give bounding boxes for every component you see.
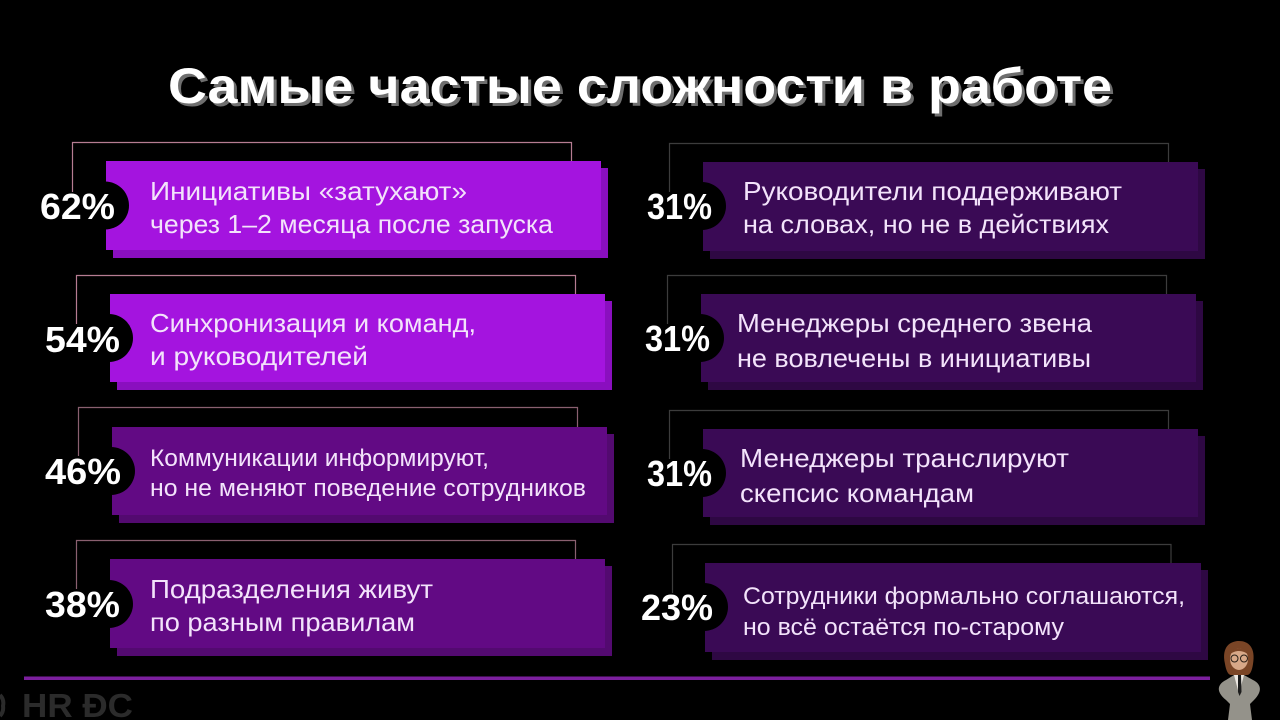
panel: 23% employees formally agree <box>641 544 1208 660</box>
panel: 46% communications <box>45 408 614 523</box>
title: Самые частые сложности в работе <box>168 58 1112 114</box>
text: synchronisation <box>150 308 476 371</box>
text: initiatives fade <box>150 176 554 239</box>
text: departments <box>150 574 433 637</box>
text: communications: Коммуникации информируют, <box>150 445 489 472</box>
text: synchronisation: и руководителей <box>150 341 368 371</box>
text: communications <box>150 445 586 502</box>
text: middle managers not involved: не вовлечены в инициативы <box>737 343 1091 373</box>
panel: 31% managers broadcast scepticism <box>647 410 1205 525</box>
panel: 38% departments <box>45 540 612 656</box>
text: leaders support in words: на словах, но не в действиях <box>743 209 1109 239</box>
text: initiatives fade: через 1–2 месяца после запуска <box>150 209 554 239</box>
text: departments: Подразделения живут <box>150 574 433 604</box>
panel: 62% initiatives fade <box>40 142 608 258</box>
label: 23%: 23% <box>641 587 713 628</box>
text: synchronisation: Синхронизация и команд, <box>150 308 476 338</box>
label: 31%: 31% <box>647 186 712 227</box>
label: 62%: 62% <box>40 186 115 227</box>
text: managers broadcast scepticism: Менеджеры транслируют <box>740 443 1069 473</box>
panel: 31% leaders support in words <box>647 144 1205 259</box>
label: 31%: 31% <box>647 453 712 494</box>
label: 38%: 38% <box>45 584 120 625</box>
text: middle managers not involved <box>737 308 1093 373</box>
label: 46%: 46% <box>45 451 121 492</box>
text: middle managers not involved: Менеджеры среднего звена <box>737 308 1093 338</box>
text: employees formally agree <box>743 583 1185 641</box>
icon: woman in grey suit <box>1219 641 1260 720</box>
footer line <box>24 676 1210 680</box>
text: managers broadcast scepticism <box>740 443 1069 508</box>
panel: 31% middle managers not involved <box>645 276 1203 390</box>
text: initiatives fade: Инициативы «затухают» <box>150 176 467 206</box>
panel: 54% synchronisation <box>45 276 612 390</box>
text: leaders support in words: Руководители поддерживают <box>743 176 1122 206</box>
text: managers broadcast scepticism: скепсис командам <box>740 478 974 508</box>
text: communications: но не меняют поведение сотрудников <box>150 475 586 502</box>
label: 54%: 54% <box>45 319 120 360</box>
text: departments: по разным правилам <box>150 607 415 637</box>
text: employees formally agree: Сотрудники формально соглашаются, <box>743 583 1185 610</box>
label: 31%: 31% <box>645 318 710 359</box>
text: employees formally agree: но всё остаётся по-старому <box>743 614 1064 641</box>
text: leaders support in words <box>743 176 1122 239</box>
